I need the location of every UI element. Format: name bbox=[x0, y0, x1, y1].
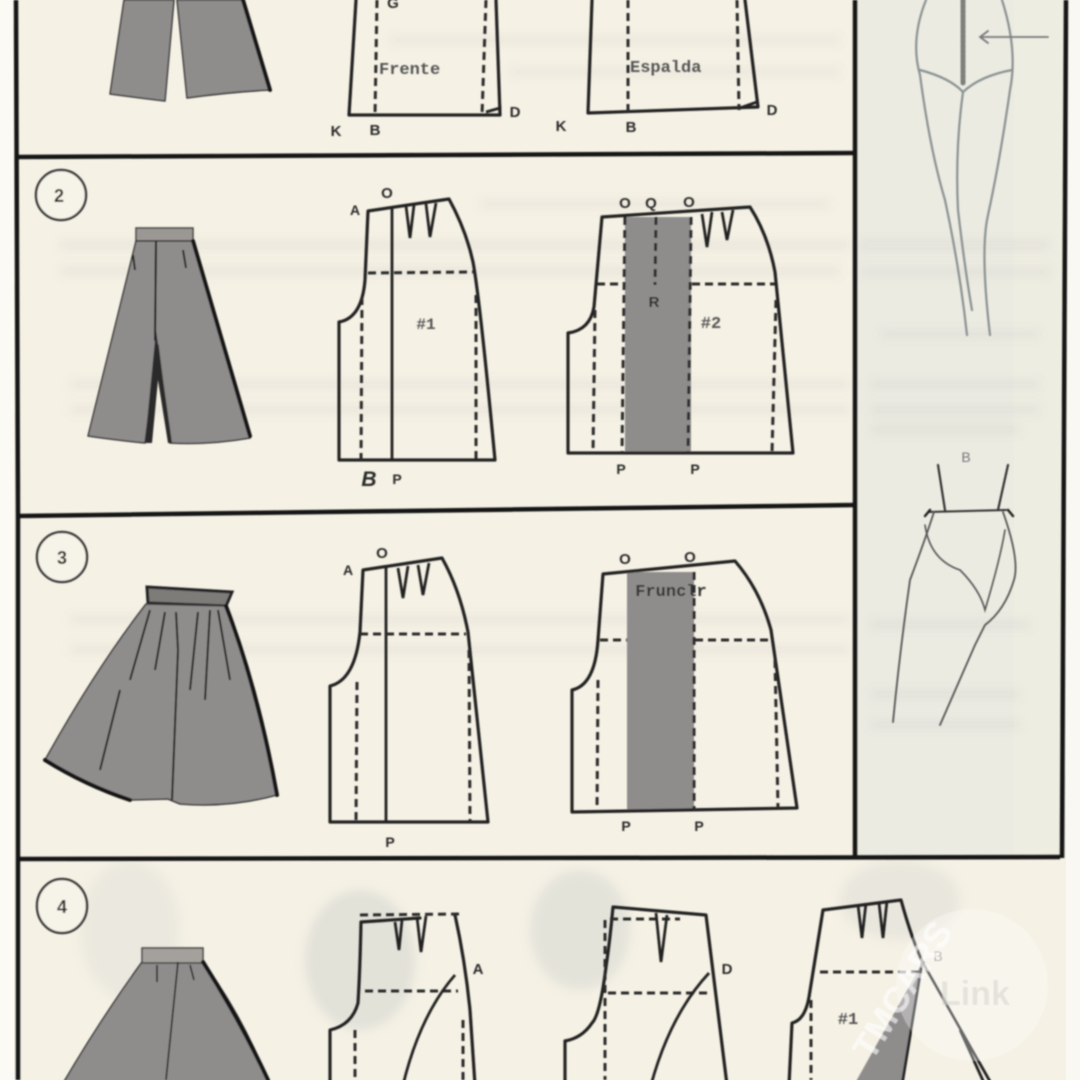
pattern 2 piece 1 bbox=[339, 185, 495, 491]
pattern 4 piece D bbox=[565, 907, 733, 1080]
figure: hips with letter B bbox=[893, 449, 1016, 725]
pattern 2 piece 1: O bbox=[381, 185, 393, 202]
pattern 3 piece 1: A bbox=[343, 562, 353, 578]
pattern 4 piece A bbox=[330, 914, 484, 1080]
figure: body with zip and arrow bbox=[916, 0, 1048, 335]
pattern 3 piece 1 bbox=[330, 545, 488, 850]
pattern 4 piece B with grey wedge bbox=[789, 900, 992, 1080]
pattern 4 piece D: D bbox=[722, 961, 733, 978]
pattern 2 piece 2 with grey panel bbox=[568, 194, 793, 477]
pattern 2 piece 1: P bbox=[392, 471, 402, 487]
pattern 3 piece 2 with grey panel: P bbox=[694, 818, 704, 834]
pattern 2 piece 1: #1 bbox=[416, 316, 436, 334]
pattern 4 piece B with grey wedge: B bbox=[933, 948, 943, 964]
pattern 3 piece 1: O bbox=[376, 545, 388, 562]
pattern 2 piece 2 with grey panel: O bbox=[683, 194, 695, 211]
step number 3 bbox=[37, 532, 87, 582]
garment 3: gathered culottes bbox=[45, 587, 277, 805]
step number 2: 2 bbox=[54, 186, 64, 206]
pattern 2 piece 2 with grey panel: Q bbox=[645, 195, 657, 212]
pattern 3 piece 2 with grey panel: O bbox=[619, 551, 631, 568]
watermark: TMCARS link: Link bbox=[940, 975, 1010, 1013]
panel 1: garment and patterns (cropped) bbox=[110, 0, 778, 140]
pattern 2 piece 1: A bbox=[350, 202, 360, 218]
pattern 2 piece 1: B bbox=[361, 468, 377, 491]
pattern 1: Espalda bbox=[556, 0, 778, 136]
pattern 2 piece 2 with grey panel: O bbox=[619, 195, 631, 212]
pattern 1: Frente: D bbox=[510, 104, 521, 121]
pattern 1: Frente: Frente bbox=[379, 61, 440, 80]
side panel: figures bbox=[893, 0, 1048, 725]
garment 4: flared skirt bbox=[62, 948, 270, 1080]
pattern 1: Frente bbox=[331, 0, 521, 140]
step number 4 bbox=[37, 879, 87, 933]
pattern 3 piece 1: P bbox=[385, 834, 395, 850]
figure: hips with letter B: B bbox=[961, 449, 971, 465]
pattern 3 piece 2 with grey panel: Frunclr bbox=[635, 583, 707, 602]
pattern 4 piece A: A bbox=[473, 961, 484, 978]
step number 4: 4 bbox=[57, 897, 67, 917]
pattern 1: Frente: B bbox=[370, 122, 381, 139]
step number 3: 3 bbox=[57, 548, 67, 568]
pattern 1: Espalda: D bbox=[767, 102, 778, 119]
panel 4: flared culottes bbox=[37, 879, 992, 1080]
pattern 2 piece 2 with grey panel: R bbox=[649, 294, 660, 311]
pattern 3 piece 2 with grey panel bbox=[572, 549, 797, 834]
watermark: TMCARS link bbox=[844, 909, 1048, 1066]
garment 1: wide trousers bbox=[110, 0, 270, 101]
pattern 2 piece 2 with grey panel: #2 bbox=[701, 315, 721, 334]
watermark: TMCARS link: TMCARS bbox=[844, 914, 960, 1066]
panel 3: gathered culottes bbox=[37, 532, 797, 850]
pattern 3 piece 2 with grey panel: P bbox=[621, 818, 631, 834]
pattern 2 piece 2 with grey panel: P bbox=[690, 461, 700, 477]
garment 2: culottes bbox=[88, 228, 250, 443]
pattern 2 piece 2 with grey panel: P bbox=[616, 461, 626, 477]
pattern 1: Espalda: K bbox=[556, 118, 567, 135]
pattern 4 piece B with grey wedge: #1 bbox=[838, 1011, 858, 1030]
pattern 1: Espalda: B bbox=[626, 119, 637, 136]
pattern 1: Frente: K bbox=[331, 123, 342, 140]
step number 2 bbox=[36, 170, 86, 220]
pattern 1: Espalda: Espalda bbox=[630, 59, 701, 78]
pattern 3 piece 2 with grey panel: O bbox=[684, 549, 696, 566]
panel 2: culottes bbox=[36, 170, 793, 491]
